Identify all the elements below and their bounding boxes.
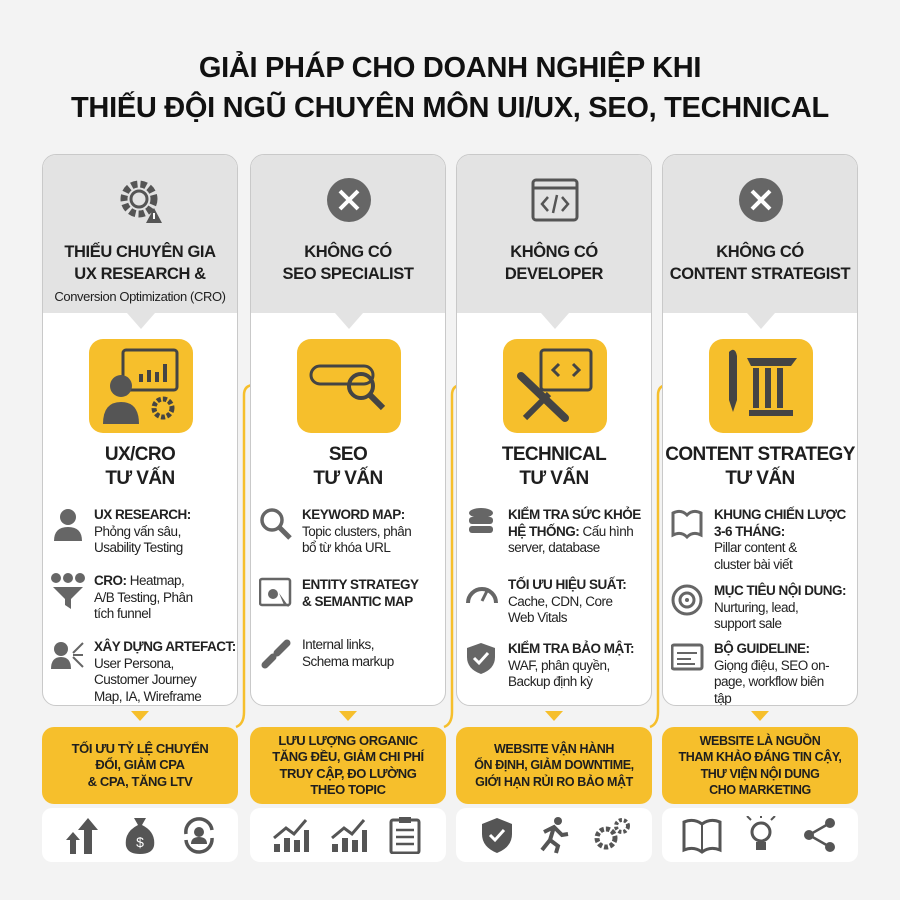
result: Content: CHO MARKETING [709,783,811,797]
icons row: UX [42,808,238,862]
item: performance: Web Vitals [508,610,567,625]
item: keyword map: Topic clusters, phân [302,524,411,538]
item: guideline: BỘ GUIDELINE: [714,641,810,656]
item: framework: 3-6 THÁNG: [714,524,785,538]
item: goals: Nurturing, lead, [714,600,798,614]
item: goals [672,582,846,631]
icon box [297,339,401,433]
panel: UX/CRO [42,154,238,706]
item: CRO: tích funnel [94,606,151,621]
card title: UX/CRO [105,444,175,465]
header text [670,242,850,283]
card title: CONTENT STRATEGY [665,444,855,465]
header text: SEO SPECIALIST [282,265,414,283]
header text: UX RESEARCH & [74,265,206,283]
result: Content: THƯ VIỆN NỘI DUNG [701,766,819,780]
header text [282,242,414,283]
item: links: Internal links, [302,637,374,652]
icons row: Technical [456,808,652,862]
icons row: Content [662,808,858,862]
result: Technical: GIỚI HẠN RỦI RO BẢO MẬT [475,775,633,789]
item: goals: MỤC TIÊU NỘI DUNG: [714,583,846,598]
result: Technical [456,727,652,804]
item: framework: KHUNG CHIẾN LƯỢC [714,507,846,522]
card title [502,444,606,489]
item: security: KIỂM TRA BẢO MẬT: [508,641,634,656]
result: SEO [250,727,446,804]
item: links: Schema markup [302,654,394,668]
header text: Conversion Optimization (CRO) [54,289,226,304]
item: performance [466,576,626,625]
item: artefact: Map, IA, Wireframe [94,688,201,704]
result: SEO: THEO TOPIC [310,782,386,797]
item: security [467,640,634,689]
item: artefact: Customer Journey [94,672,196,687]
result: UX: ĐỔI, GIẢM CPA [95,757,185,772]
item: keyword map: KEYWORD MAP: [302,507,405,522]
item: entity: & SEMANTIC MAP [302,594,413,608]
header text: THIẾU CHUYÊN GIA [64,243,216,261]
item: UX research: Usability Testing [94,540,183,555]
header text: DEVELOPER [505,265,603,283]
header text [505,242,603,283]
item: keyword map: bổ từ khóa URL [302,540,390,555]
item: CRO: A/B Testing, Phân [94,590,193,604]
item: health: server, database [508,540,600,555]
card title [105,444,175,489]
arrows down [131,711,149,721]
item: framework: cluster bài viết [714,556,792,572]
icon: x circle [327,178,371,222]
title [71,51,829,124]
card title [313,444,383,489]
item: links [262,637,394,669]
result: Content: WEBSITE LÀ NGUỒN [700,734,820,748]
item: guideline: page, workflow biên [714,674,824,689]
item: health: KIỂM TRA SỨC KHỎE [508,507,641,522]
item: UX research [54,507,191,555]
result: UX: & CPA, TĂNG LTV [88,774,192,789]
icon: code window [532,178,578,222]
result: Technical: WEBSITE VẬN HÀNH [494,742,614,756]
icon box [709,339,813,433]
item: UX research: UX RESEARCH: [94,507,191,522]
item: framework [672,506,846,572]
item: security: Backup định kỳ [508,674,593,689]
icon: broken gear [120,180,162,223]
card title [665,444,856,489]
item: guideline [671,640,830,706]
result: Technical: ỔN ĐỊNH, GIẢM DOWNTIME, [474,758,634,772]
item: guideline: tập [714,690,731,706]
item: keyword map [260,507,411,555]
item: CRO: CRO: Heatmap, [94,573,184,588]
title: THIẾU ĐỘI NGŨ CHUYÊN MÔN UI/UX, SEO, TECHNICAL [71,92,829,124]
item: entity [259,577,419,608]
result: Content [662,727,858,804]
result: SEO: LƯU LƯỢNG ORGANIC [278,732,418,748]
item: CRO [51,573,193,621]
icons row: SEO [250,808,446,862]
title: GIẢI PHÁP CHO DOANH NGHIỆP KHI [199,52,701,84]
header text [54,242,226,304]
item: security: WAF, phân quyền, [508,658,610,672]
card title: SEO [329,444,367,465]
header text: KHÔNG CÓ [304,243,392,261]
icon box [503,339,607,433]
header text: KHÔNG CÓ [510,243,598,261]
item: performance: TỐI ƯU HIỆU SUẤT: [508,577,626,592]
card title: TƯ VẤN [725,468,795,489]
item: artefact: XÂY DỰNG ARTEFACT: [94,639,236,654]
result: SEO: TRUY CẬP, ĐO LƯỜNG [279,766,416,780]
item: artefact: User Persona, [94,656,174,670]
item: goals: support sale [714,616,782,631]
icon: x circle [739,178,783,222]
item: entity: ENTITY STRATEGY [302,577,419,592]
item: performance: Cache, CDN, Core [508,594,613,608]
item: health: HỆ THỐNG: Cấu hình [508,524,633,538]
header text: CONTENT STRATEGIST [670,265,850,283]
item: health [469,506,641,555]
result: UX [42,727,238,804]
card title: TƯ VẤN [313,468,383,489]
icons row: UX: $ [136,834,144,850]
icon box [89,339,193,433]
panel: Content strategy [662,154,858,706]
result: SEO: TĂNG ĐỀU, GIẢM CHI PHÍ [272,749,424,764]
panel: SEO [250,154,446,706]
item: guideline: Giọng điệu, SEO on- [714,658,829,672]
card title: TƯ VẤN [519,468,589,489]
panel: Technical [456,154,652,706]
result: Content: THAM KHẢO ĐÁNG TIN CẬY, [678,750,842,764]
header text: KHÔNG CÓ [716,243,804,261]
card title: TECHNICAL [502,444,606,465]
item: framework: Pillar content & [714,540,797,555]
result: UX: TỐI ƯU TỶ LỆ CHUYỂN [72,741,208,756]
item: artefact [51,638,236,704]
card title: TƯ VẤN [105,468,175,489]
item: UX research: Phỏng vấn sâu, [94,524,181,538]
